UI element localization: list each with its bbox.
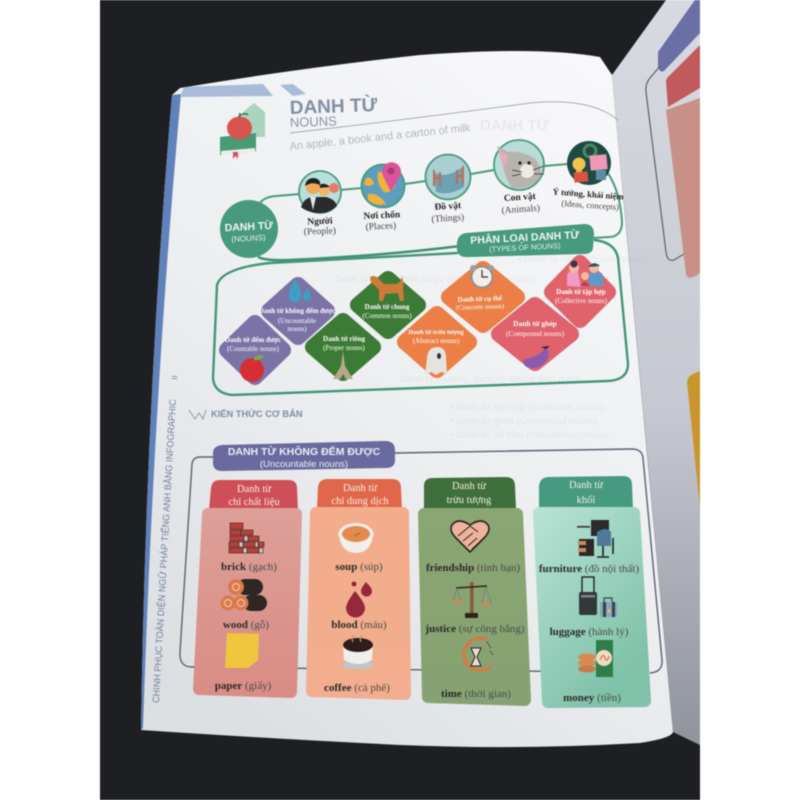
connector line: noun categories — [258, 164, 622, 238]
bleed-through text: • Danh từ riêng (Proper nouns) — [518, 254, 648, 265]
diamond: uncountable nouns: (Uncountable — [278, 317, 316, 325]
category: things: Đồ vật — [434, 200, 462, 213]
diamond: collective nouns — [552, 260, 608, 320]
tab: liquid nouns: Danh từ — [343, 483, 377, 494]
icon: furniture — [577, 520, 613, 557]
icon: apple on a book with milk carton — [220, 103, 265, 159]
category: ideas: Ý tưởng, khái niệm — [552, 187, 625, 202]
diamond: collective nouns: Danh từ tập hợp — [556, 288, 606, 296]
right page outline — [646, 66, 684, 260]
card: mass nouns — [539, 513, 645, 702]
label: soup: soup (súp) — [335, 561, 383, 573]
diamond: common nouns: (Common nouns) — [362, 312, 412, 320]
dark table background — [100, 0, 700, 800]
tab: liquid nouns: chỉ dung dịch — [331, 496, 389, 507]
diamond: proper nouns — [313, 321, 373, 379]
white margin right — [700, 0, 800, 800]
bleed-through text: • Danh từ tập hợp (Collective nouns) — [450, 402, 604, 413]
icon: coffee cup — [342, 635, 374, 669]
tab: material nouns: chỉ chất liệu — [228, 497, 280, 508]
connector line: to types box — [258, 246, 460, 260]
section mark: basic knowledge: KIẾN THỨC CƠ BẢN — [211, 408, 303, 419]
label: time: time (thời gian) — [441, 688, 511, 700]
column: material nouns — [199, 480, 298, 692]
subtitle: Nouns: NOUNS — [290, 113, 337, 130]
right page red tab — [666, 45, 700, 107]
example sentence: An apple, a book and a carton of milk — [289, 122, 471, 153]
diamond: countable nouns: (Countable nouns) — [227, 345, 280, 353]
label: justice: justice (sự công bằng) — [424, 623, 525, 635]
pill: types of nouns: (TYPES OF NOUNS) — [489, 241, 561, 254]
category: animals: (Animals) — [501, 203, 540, 216]
label: friendship: friendship (tình bạn) — [426, 562, 520, 574]
bleed-through text: Danh từ thường, danh từ không đếm được — [400, 374, 581, 385]
label: coffee: coffee (cà phê) — [324, 682, 390, 694]
diamond: uncountable nouns — [259, 279, 335, 337]
bleed-through text: • Danh từ sở hữu (Possessive nouns) — [450, 430, 609, 441]
label: luggage: luggage (hành lý) — [550, 626, 629, 638]
diamond: uncountable nouns: Danh từ không đếm được — [259, 307, 335, 315]
header curved divider — [290, 102, 618, 133]
label: furniture: furniture (đồ nội thất) — [539, 563, 639, 575]
icon: scales of justice — [453, 582, 491, 618]
card: abstract nouns — [424, 514, 525, 700]
page blue left edge — [141, 94, 181, 730]
right page yellow card — [687, 371, 700, 508]
uncountable nouns outline — [180, 449, 662, 673]
tab: abstract nouns — [424, 477, 516, 509]
label: paper: paper (giấy) — [215, 680, 272, 692]
pill: uncountable nouns: DANH TỪ KHÔNG ĐẾM ĐƯỢC — [228, 445, 381, 458]
card: liquid nouns — [312, 513, 405, 694]
diamond: compound nouns: (Compound nouns) — [506, 329, 565, 338]
bleed-through text: • Danh từ ghép (Compound nouns) — [450, 416, 598, 427]
noun circle: (NOUNS) — [231, 233, 266, 244]
diamond: collective nouns: (Collective nouns) — [555, 297, 608, 305]
icon: brick wall — [229, 523, 264, 553]
diamond: countable nouns: Danh từ đếm được — [225, 336, 281, 344]
pill: types of nouns: PHÂN LOẠI DANH TỪ — [470, 228, 580, 247]
diamond: concrete nouns: (Concrete nouns) — [456, 302, 505, 312]
bleed-through text: Danh từ không đếm được (Uncountable nouns) — [335, 274, 535, 285]
noun circle — [220, 200, 278, 258]
pill: types of nouns — [457, 224, 594, 257]
diamond: proper nouns: Danh từ riêng — [323, 335, 365, 343]
tab: abstract nouns: trừu tượng — [447, 495, 492, 506]
label: money: money (tiền) — [563, 692, 621, 704]
category: places: Nơi chốn — [363, 209, 401, 222]
right page red card — [666, 98, 700, 278]
category: animals — [494, 140, 544, 216]
diamond: compound nouns: Danh từ ghép — [513, 319, 557, 328]
label: brick: brick (gạch) — [221, 561, 277, 573]
label: wood: wood (gỗ) — [223, 619, 269, 631]
right page uncountable pill — [658, 0, 700, 71]
icon: soup bowl — [338, 523, 374, 553]
tab: mass nouns: Danh từ — [569, 480, 603, 491]
diamond: abstract nouns — [405, 314, 469, 375]
icon: blood drops — [346, 582, 372, 618]
column: mass nouns — [539, 476, 645, 704]
diamond: compound nouns — [499, 305, 571, 368]
category: ideas: (Ideas, concepts) — [561, 198, 619, 212]
bleed-through text — [335, 116, 648, 441]
category: places: (Places) — [365, 220, 396, 233]
right facing page — [612, 0, 700, 745]
tab: material nouns: Danh từ — [237, 484, 271, 495]
diamond: common nouns: Danh từ chung — [365, 303, 410, 311]
diamond: proper nouns: (Proper nouns) — [323, 344, 366, 352]
title: Danh từ: DANH TỪ — [289, 94, 378, 119]
card: material nouns — [199, 514, 296, 692]
tab: abstract nouns: Danh từ — [452, 481, 486, 492]
types of nouns box — [213, 240, 628, 395]
tab: mass nouns — [539, 476, 633, 509]
tab: material nouns — [209, 480, 298, 510]
diamond: concrete nouns: Danh từ cụ thể — [458, 294, 503, 304]
spine text: CHINH PHỤC TOÀN DIỆN NGỮ PHÁP TIẾNG ANH BẰNG INFOGRAPHIC — [151, 399, 179, 703]
diamond: countable nouns — [225, 323, 283, 382]
pill: uncountable nouns — [213, 441, 395, 471]
pill: uncountable nouns: (Uncountable nouns) — [260, 459, 348, 470]
icon: luggage — [579, 577, 617, 617]
diamond: abstract nouns: (Abstract nouns) — [413, 337, 460, 345]
category: people: (People) — [304, 225, 336, 238]
bleed-through text: DANH TỪ — [480, 116, 550, 134]
diamond: uncountable nouns: nouns) — [287, 325, 307, 333]
category: people — [299, 171, 341, 238]
category: things — [426, 154, 470, 225]
icon: hourglass and clock arrow — [464, 638, 493, 670]
page number mark: II — [170, 375, 179, 380]
column: liquid nouns — [312, 479, 405, 694]
icon: paper sheet — [225, 633, 259, 668]
category: things: (Things) — [431, 212, 465, 225]
column: abstract nouns — [424, 477, 525, 700]
category: ideas — [552, 141, 625, 212]
tab: mass nouns: khối — [577, 495, 595, 506]
noun circle: DANH TỪ — [224, 219, 274, 234]
diamond: common nouns — [358, 276, 418, 331]
icon: wood logs — [220, 579, 267, 611]
diamond: concrete nouns — [449, 265, 517, 325]
icon: money — [578, 640, 613, 677]
top blue tabs — [180, 84, 306, 97]
label: blood: blood (máu) — [331, 619, 387, 631]
icon: handshake heart — [451, 521, 489, 552]
diamond: abstract nouns: Danh từ trừu tượng — [408, 329, 464, 336]
tab: liquid nouns — [317, 479, 402, 509]
main book page — [141, 51, 673, 747]
category: animals: Con vật — [504, 192, 537, 204]
category: places — [362, 162, 404, 233]
category: people: Người — [307, 217, 333, 227]
white margin left — [0, 0, 100, 800]
